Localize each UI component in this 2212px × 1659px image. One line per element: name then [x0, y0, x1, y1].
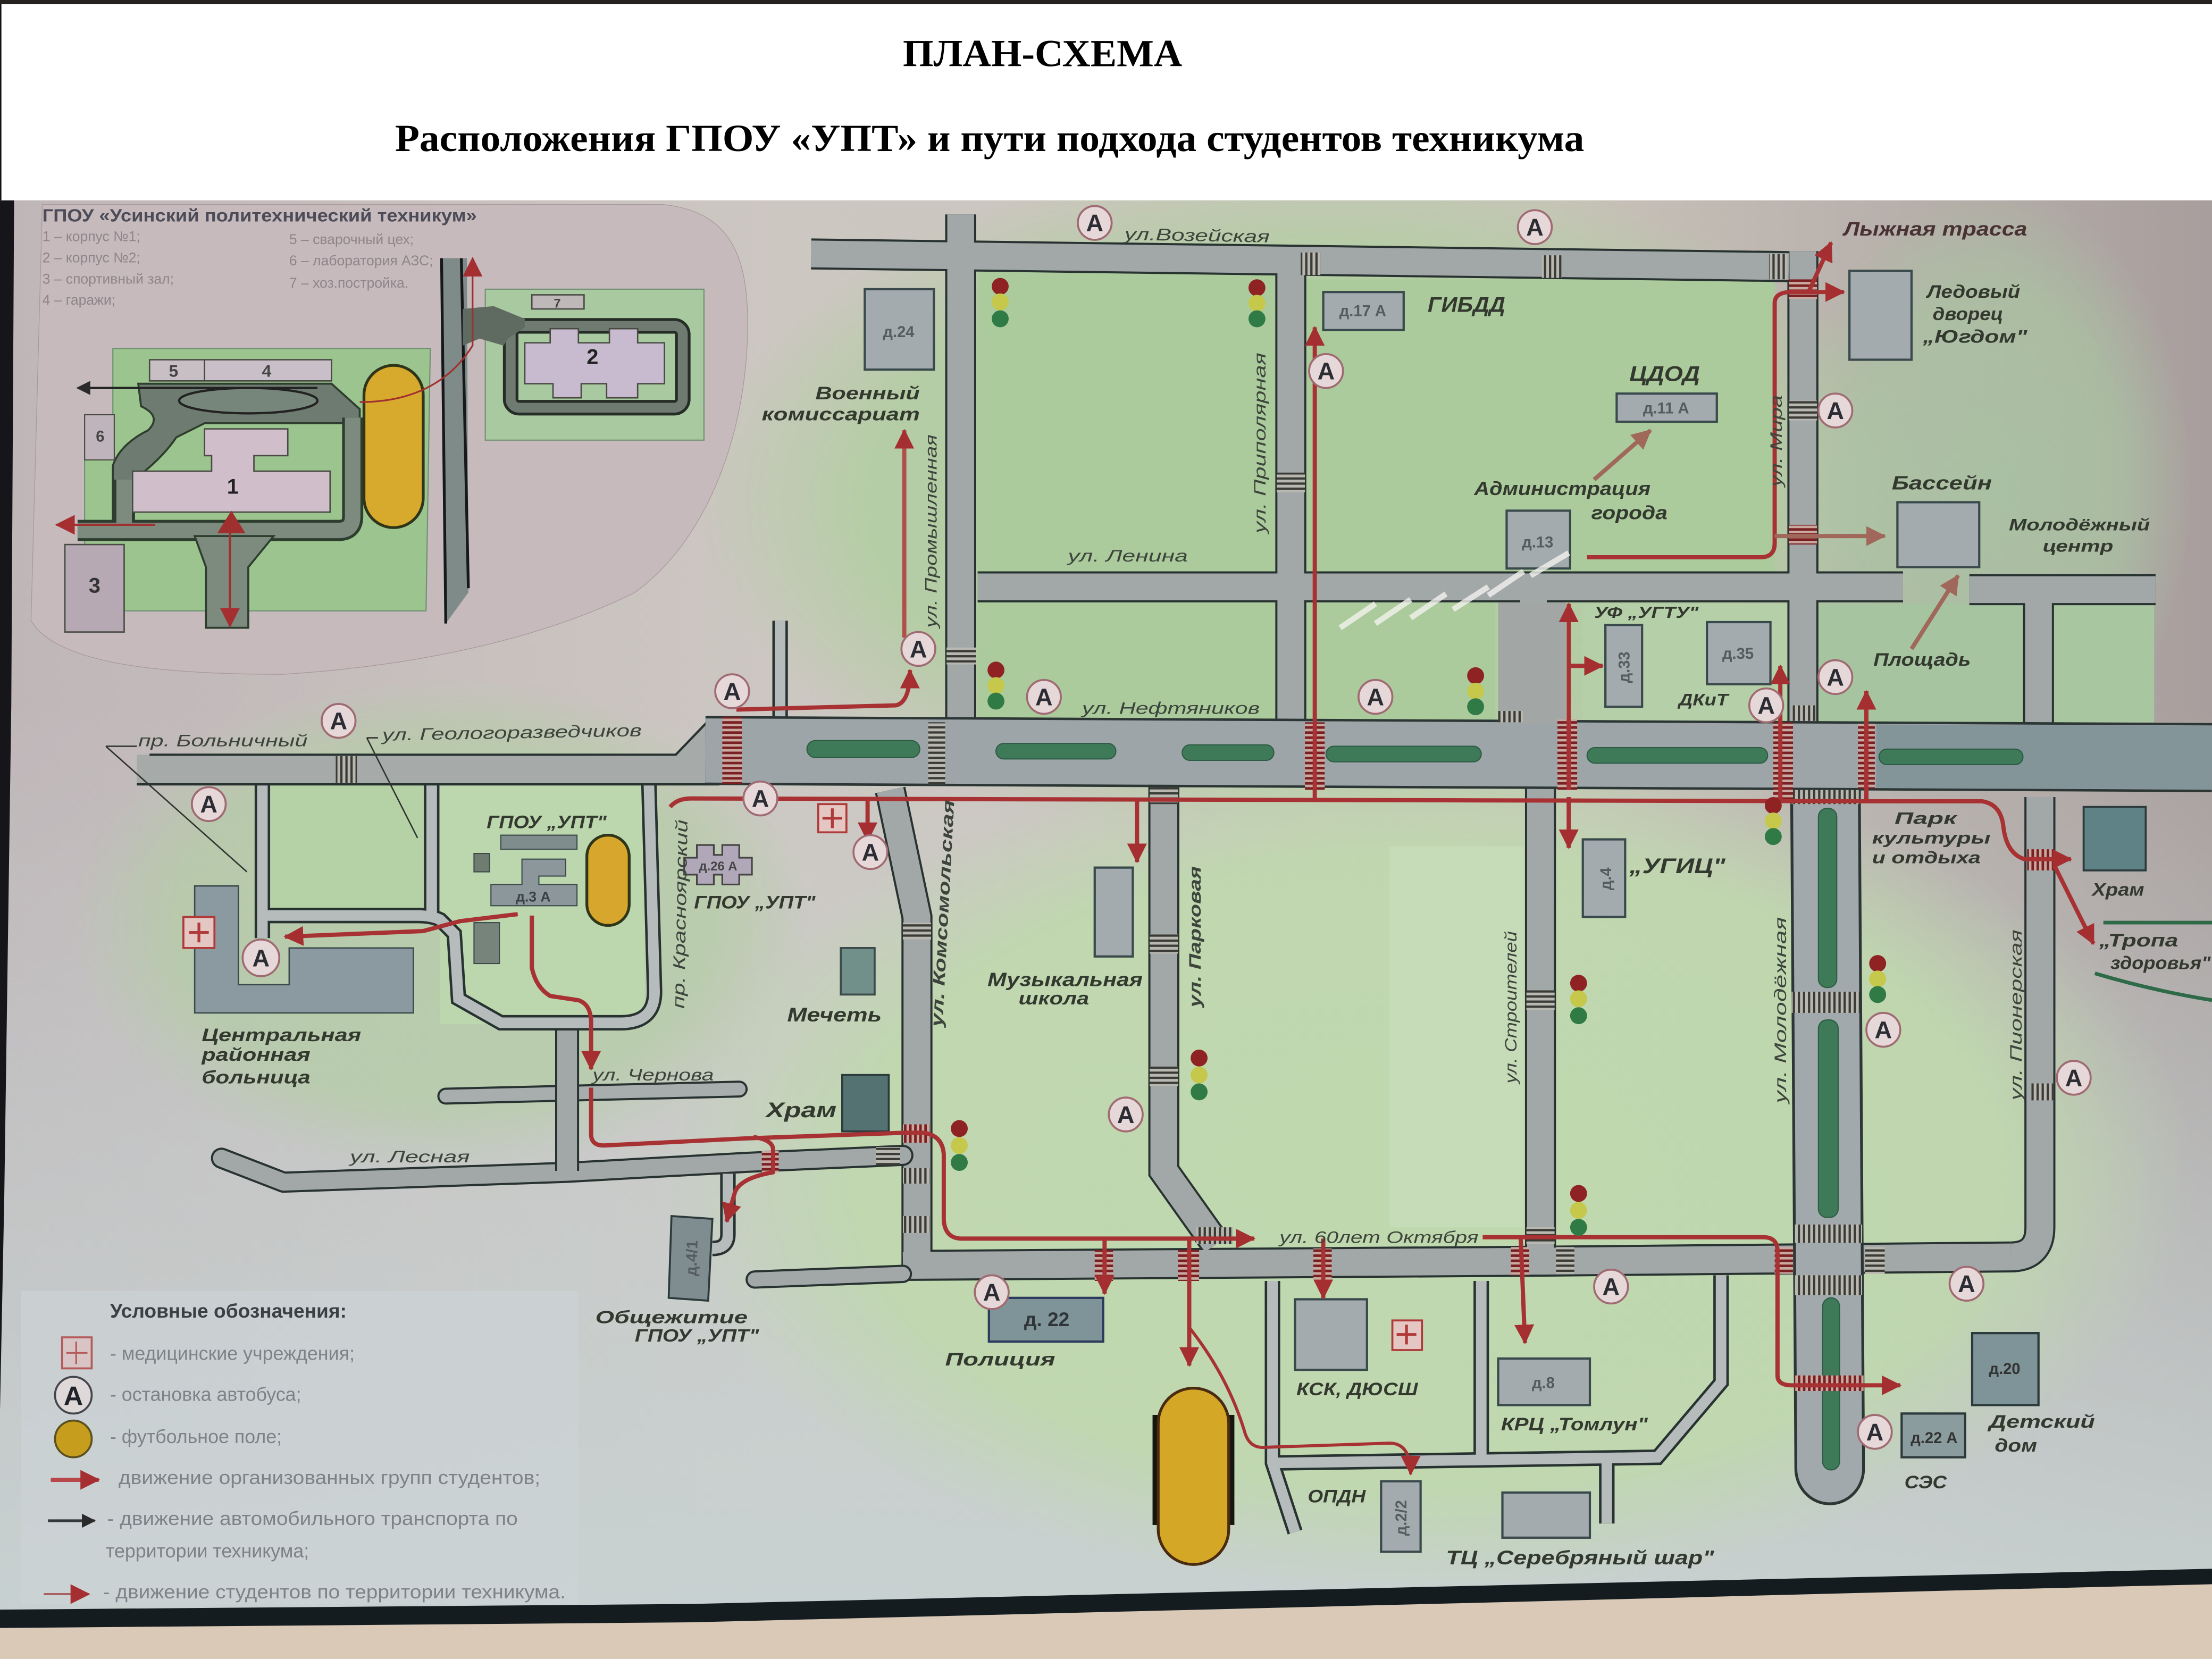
road outlines: [811, 214, 2156, 1266]
place names: Музыкальная: [987, 969, 1143, 990]
legend: medical: - медицинские учреждения;: [110, 1343, 355, 1364]
gpou small buildings: [474, 835, 577, 963]
traffic lights: [951, 278, 1886, 1236]
place names: и отдыха: [1872, 848, 1981, 867]
Lesnaya and west street: [222, 1155, 903, 1182]
place names: Ледовый: [1925, 282, 2020, 302]
place names: больница: [202, 1068, 311, 1088]
loop road inner: [510, 326, 683, 408]
street names: ул. Приполярная: [1250, 353, 1269, 535]
hospital: [195, 886, 413, 1013]
place names: „Югдом": [1922, 327, 2027, 347]
place names: Центральная: [202, 1025, 361, 1045]
bus stops: А: [910, 635, 927, 663]
place names: „Тропа: [2098, 931, 2178, 951]
bus stops: А: [862, 839, 879, 866]
place names: центр: [2043, 536, 2113, 555]
bus stops: А: [724, 678, 741, 705]
street names: пр. Красноярский: [669, 819, 691, 1009]
d.35 label: д.35: [1722, 646, 1754, 663]
inset heading: ГПОУ «Усинский политехнический техникум»: [43, 206, 477, 226]
street names: ул. Пионерская: [2006, 929, 2025, 1102]
green medians: [807, 741, 2023, 1470]
student routes: [285, 242, 2093, 1474]
place names: Военный: [815, 383, 920, 404]
d.17A: [1323, 292, 1404, 330]
gpou football field: [587, 835, 629, 925]
label 7: 7: [554, 296, 561, 311]
east church: [2084, 807, 2146, 870]
place names: Парк: [1895, 808, 1958, 827]
bottom edge: [0, 1569, 2212, 1628]
legend: football: - футбольное поле;: [110, 1426, 282, 1447]
left rule: [0, 4, 2, 200]
d.20: [1972, 1333, 2039, 1405]
place names: Храм: [765, 1099, 836, 1122]
left edge: [0, 200, 14, 1411]
white band: [0, 4, 2212, 200]
campus oval: [179, 388, 317, 413]
medical crosses: [183, 804, 1422, 1350]
d.13 label: д.13: [1522, 534, 1553, 551]
d.26A: [684, 845, 752, 884]
legend: football: [55, 1421, 282, 1457]
bus stops: А: [253, 944, 270, 971]
place names: ЦДОД: [1629, 362, 1700, 386]
label 6: 6: [96, 428, 104, 445]
bus stops: А: [1035, 684, 1053, 711]
d.17A label: д.17 А: [1339, 303, 1386, 320]
building 3: [65, 544, 124, 632]
legend: [44, 1300, 566, 1603]
place names: Молодёжный: [2009, 515, 2150, 534]
place names: районная: [201, 1045, 311, 1065]
bus stops: А: [1866, 1419, 1883, 1446]
dorm d.4/1: [669, 1216, 713, 1301]
d.33: [1605, 625, 1642, 707]
place names: СЭС: [1905, 1472, 1947, 1493]
d.8: [1498, 1359, 1590, 1405]
label 4: 4: [262, 361, 272, 380]
street names: ул. Промышленная: [921, 434, 941, 629]
d.35: [1707, 622, 1771, 684]
d.22A: [1901, 1413, 1965, 1457]
place names: ГИБДД: [1428, 293, 1505, 316]
inset key: 7 – хоз.постройка.: [289, 275, 408, 291]
thin streets: [262, 621, 1721, 1532]
plot 2: [485, 289, 704, 440]
legend: vehicles: территории техникума;: [106, 1540, 309, 1562]
header panel: [0, 0, 2212, 200]
d.8 label: д.8: [1532, 1375, 1555, 1392]
place names: дом: [1995, 1436, 2037, 1456]
subtitle: Расположения ГПОУ «УПТ» и пути подхода студентов техникума: [395, 118, 1584, 160]
street names: ул. Строителей: [1501, 931, 1520, 1085]
place names: Мечеть: [787, 1003, 882, 1026]
buildings: [195, 271, 2146, 1564]
window glare: [1340, 553, 1569, 628]
inset key: 2 – корпус №2;: [43, 249, 140, 265]
campus south road: [195, 536, 274, 628]
inset west arrow: [56, 524, 155, 525]
place names: школа: [1019, 988, 1089, 1009]
bus stops: А: [752, 785, 769, 812]
ice palace: [1849, 271, 1912, 360]
street names: ул. 60лет Октября: [1278, 1227, 1478, 1246]
crosswalks: [336, 253, 2054, 1391]
bus stops: А: [1318, 358, 1335, 385]
legend: bus stop: А: [64, 1380, 83, 1411]
place names: ГПОУ „УПТ": [487, 812, 607, 832]
d.2/2 label: д.2/2: [1393, 1500, 1410, 1536]
street names: [138, 224, 2025, 1246]
inset key: [43, 229, 433, 308]
bus stops: А: [1603, 1273, 1620, 1301]
bus stops: А: [1826, 664, 1844, 691]
street names: ул. Парковая: [1185, 866, 1204, 1009]
place names: культуры: [1872, 828, 1990, 848]
inset red routes: [360, 258, 473, 402]
inset key: 1 – корпус №1;: [43, 229, 140, 245]
d.22A label: д.22 А: [1911, 1430, 1957, 1447]
place names: ДКиТ: [1677, 690, 1730, 709]
label 2: 2: [586, 345, 598, 368]
legend: medical: [62, 1337, 355, 1368]
link road: [463, 306, 525, 346]
street names: ул. Ленина: [1067, 546, 1188, 565]
inset north arrowhead: [217, 510, 246, 533]
building 4: [205, 360, 331, 381]
place names: комиссариат: [762, 405, 920, 425]
inset road edges: [441, 258, 468, 624]
place names: Храм: [2091, 880, 2144, 900]
street names: ул. Чернова: [591, 1065, 714, 1084]
bus stops: А: [1367, 684, 1384, 711]
place names: УФ „УГТУ": [1594, 605, 1699, 622]
street names: ул. Молодёжная: [1771, 917, 1790, 1105]
legend: bus stop: [55, 1377, 301, 1413]
street names: ул.Возейская: [1123, 224, 1270, 246]
campus yard: [113, 384, 360, 525]
d.20 label: д.20: [1989, 1361, 2021, 1378]
d.3A label: д.3 А: [516, 889, 551, 904]
junction block: [1498, 602, 1566, 724]
bus stops: А: [1086, 210, 1103, 237]
label 1: 1: [227, 475, 239, 499]
dorm label: д.4/1: [683, 1240, 701, 1276]
place names: Общежитие: [596, 1308, 748, 1328]
d.22: [989, 1298, 1103, 1342]
place names: Лыжная трасса: [1842, 217, 2027, 240]
d.26A label: д.26 А: [699, 859, 738, 874]
d.4: [1583, 840, 1625, 917]
d.2/2: [1381, 1481, 1421, 1552]
d.4 label: д.4: [1598, 867, 1615, 890]
loop road plot 2: [510, 326, 683, 408]
d.11A label: д.11 А: [1643, 400, 1689, 417]
bus stops: А: [983, 1279, 1000, 1306]
label 5: 5: [169, 361, 178, 380]
bus stops: А: [200, 791, 217, 818]
building 5: [149, 360, 205, 381]
bus stops: А: [330, 708, 347, 735]
place names: КСК, ДЮСШ: [1296, 1379, 1419, 1400]
place names: ТЦ „Серебряный шар": [1446, 1546, 1714, 1569]
place names: Администрация: [1473, 478, 1650, 499]
place names: ГПОУ „УПТ": [694, 893, 816, 913]
arrows on campus: [78, 388, 317, 389]
Geologorazvedchikov edges: [137, 718, 719, 784]
street names: ул. Лесная: [348, 1147, 470, 1166]
place names: ОПДН: [1308, 1487, 1366, 1507]
avenue east shading: [1876, 756, 2212, 758]
building 6: [85, 415, 114, 460]
street names: ул. Нефтяников: [1080, 698, 1260, 717]
KSK: [1295, 1299, 1367, 1370]
bus stops: А: [1526, 214, 1544, 241]
campus road: [78, 417, 353, 531]
place names: города: [1591, 502, 1668, 523]
d.22 label: д. 22: [1024, 1308, 1069, 1330]
place names: Площадь: [1873, 650, 1971, 670]
inset key: 4 – гаражи;: [43, 292, 115, 308]
pointer arrows: [106, 738, 417, 872]
legend: vehicles: - движение автомобильного транспорта по: [107, 1508, 518, 1529]
bus stops: А: [1958, 1270, 1975, 1297]
bus stops: А: [1757, 692, 1775, 719]
place names: Детский: [1987, 1412, 2095, 1432]
bus stops: А: [1826, 397, 1844, 424]
place names: здоровья": [2110, 953, 2211, 974]
top strip: [0, 0, 2212, 4]
legend: students on campus: - движение студентов по территории техникума.: [103, 1581, 566, 1603]
place names: [201, 217, 2211, 1569]
place names: Полиция: [945, 1350, 1055, 1370]
legend title: Условные обозначения:: [110, 1300, 347, 1322]
title: ПЛАН-СХЕМА: [903, 33, 1183, 75]
inset football field: [364, 365, 423, 527]
legend: vehicles: [48, 1508, 518, 1562]
place names: КРЦ „Томлун": [1501, 1414, 1648, 1435]
d.33 label: д.33: [1616, 651, 1633, 683]
inset main road: [441, 258, 468, 624]
pool: [1897, 502, 1979, 567]
building 1: [132, 429, 330, 512]
inset south arrow: [229, 531, 230, 626]
building 2: [525, 329, 665, 398]
place names: „УГИЦ": [1629, 854, 1726, 878]
label 3: 3: [89, 574, 100, 597]
building 7: [532, 295, 584, 309]
street names: ул. Мира: [1766, 395, 1786, 488]
legend: group route: движение организованных групп студентов;: [119, 1467, 540, 1488]
d.11A: [1616, 393, 1717, 422]
bus stops: А: [1875, 1017, 1892, 1044]
street names: ул. Комсомольская: [927, 799, 958, 1029]
campus road inner: [78, 417, 353, 531]
wall: [0, 1579, 2212, 1659]
Chernova street: [446, 1089, 739, 1096]
plot 1: [85, 348, 430, 611]
inset outline: [31, 205, 748, 674]
bus stops: [192, 206, 2091, 1449]
bus stops: А: [1117, 1101, 1134, 1128]
d.24 label: д.24: [883, 324, 915, 341]
inset: campus plan: [31, 205, 748, 674]
place names: ГПОУ „УПТ": [635, 1326, 760, 1346]
d.13: [1506, 510, 1570, 568]
Geologorazvedchikov street: [137, 718, 711, 784]
legend backdrop: [21, 1291, 579, 1604]
inset key: 5 – сварочный цех;: [289, 231, 414, 247]
green trail marks: [2095, 923, 2212, 1000]
place names: дворец: [1933, 304, 2003, 324]
mosque: [841, 948, 875, 994]
roads: [137, 214, 2212, 1532]
place names: Бассейн: [1892, 473, 1992, 494]
street names: ул. Геологоразведчиков: [381, 720, 642, 744]
d.24: [865, 289, 934, 370]
south football field: [1153, 1388, 1234, 1564]
bus stops: А: [2065, 1065, 2082, 1092]
legend: bus stop: - остановка автобуса;: [110, 1384, 301, 1405]
inset key: 3 – спортивный зал;: [43, 271, 174, 287]
mall: [1503, 1493, 1590, 1538]
music school: [1095, 868, 1133, 957]
inset key: 6 – лаборатория АЗС;: [289, 253, 433, 269]
main avenue: [706, 750, 2212, 758]
connector street: [563, 1016, 572, 1171]
city blocks: [270, 271, 2154, 1227]
poster lower tint: [0, 706, 2212, 1622]
Molodezhnaya boulevard: [1791, 790, 1864, 1504]
street names: пр. Больничный: [138, 731, 308, 750]
church: [842, 1075, 889, 1132]
